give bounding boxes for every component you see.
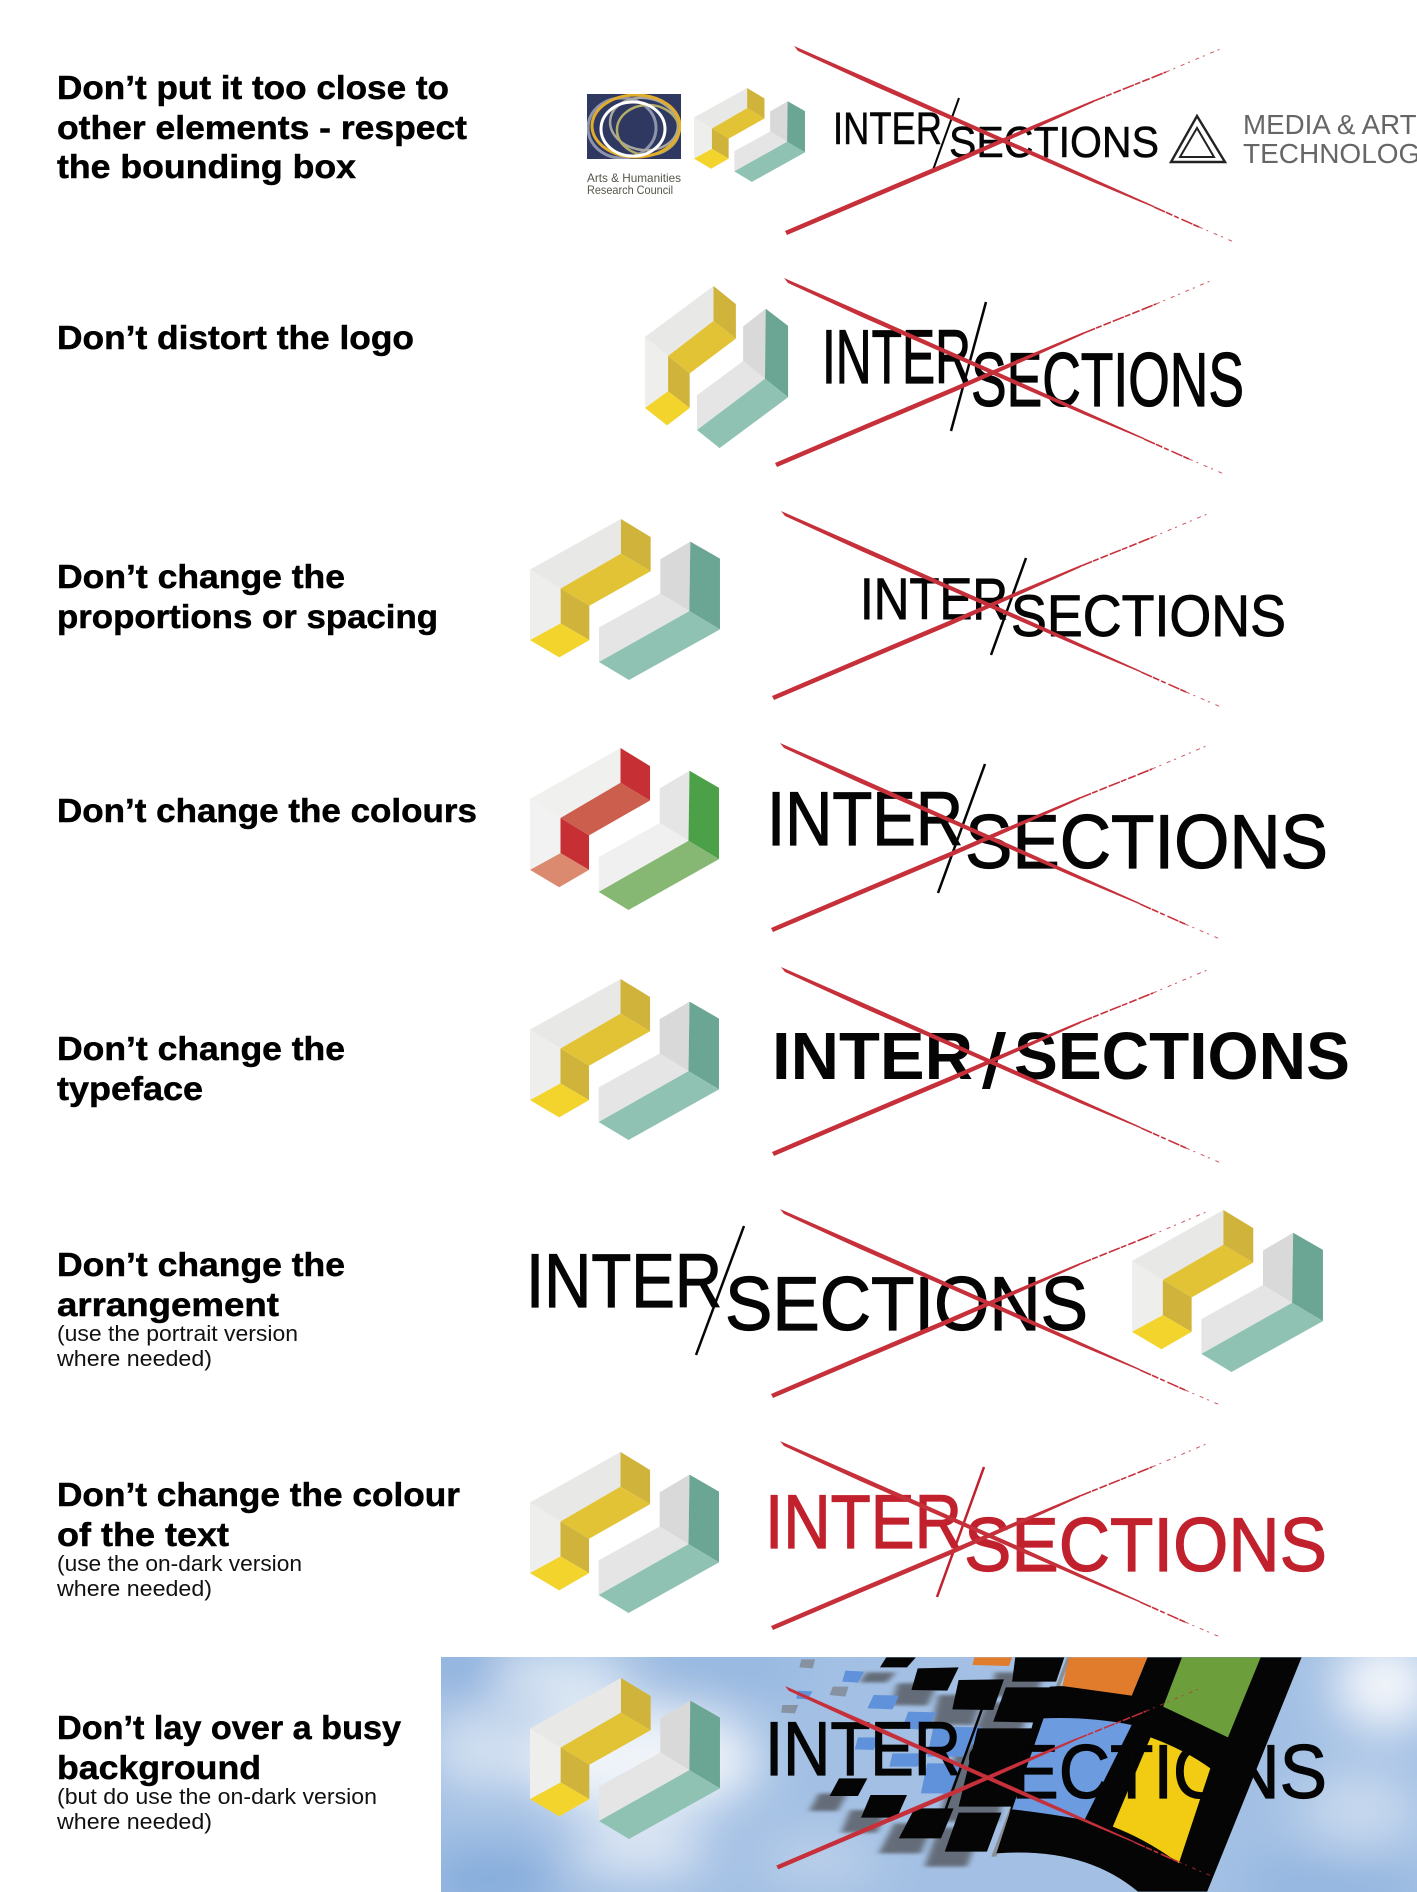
red cross [776,1686,1212,1876]
wordmark [526,1226,1088,1355]
row 6: arrangement [56,1209,1323,1405]
AHRC logo [587,94,681,197]
wordmark [767,764,1328,893]
red cross [785,46,1234,242]
row 7: colour of text [56,1441,1327,1637]
busy sky and flag background [420,1640,1417,1892]
logo symbol [530,1452,719,1613]
heading: colour of the text [56,1477,460,1601]
wordmark: SECTIONS [964,1730,1327,1815]
heading: busy background: where needed) [56,1809,212,1834]
logo symbol on the right [1132,1210,1323,1372]
heading: don't put it too close [57,70,467,186]
row 8: busy background [56,1640,1417,1892]
wordmark [765,1695,1327,1825]
red wordmark: SECTIONS [964,1503,1327,1588]
logo symbol [530,1678,720,1839]
wordmark: SECTIONS [965,800,1328,885]
heading: don't put it too close: the bounding box [57,149,356,186]
heading: proportions or spacing: Don’t change the [57,559,345,596]
red cross [772,511,1221,707]
red cross [771,743,1220,939]
heading: typeface: typeface [57,1071,203,1108]
wordmark: SECTIONS [725,1262,1088,1347]
heading: busy background: (but do use the on-dark version [57,1784,377,1809]
heading: typeface [57,1031,345,1108]
intersections logo symbol [694,88,805,182]
wordmark: INTER [526,1239,722,1324]
red cross [775,278,1224,474]
wordmark: INTER [833,103,942,154]
heading: busy background: Don’t lay over a busy [57,1710,401,1747]
media and arts technology logo [1171,109,1417,169]
wordmark: INTER [765,1707,961,1792]
heading: proportions or spacing: proportions or spacing [57,599,438,636]
logo symbol [530,979,719,1140]
red wordmark [765,1467,1327,1597]
heading: colours: Don’t change the colours [57,793,477,830]
red wordmark: INTER [765,1480,962,1565]
row 1: too close to other elements [57,46,1417,242]
heading: colour of the text: Don’t change the colour [57,1477,460,1514]
heading: busy background [56,1710,401,1834]
heading: proportions or spacing [57,559,438,636]
heading: arrangement: (use the portrait version [57,1321,298,1346]
recoloured logo symbol [530,748,719,910]
heading: don't put it too close: Don’t put it too close to [57,70,449,107]
wordmark: SECTIONS [949,118,1159,167]
red cross [771,1441,1220,1637]
row 5: typeface [57,967,1350,1163]
heading: arrangement [56,1247,345,1371]
red cross [772,967,1221,1163]
wordmark: INTER [767,777,963,862]
wordmark: SECTIONS [1011,584,1286,649]
heading: colour of the text: where needed) [56,1576,212,1601]
stretched wordmark: SECTIONS [971,338,1244,423]
wordmark [860,558,1286,655]
heading: arrangement: Don’t change the [57,1247,345,1284]
heading: don't put it too close: other elements - respect [57,110,467,147]
stretched wordmark: INTER [822,315,971,400]
heading: arrangement: arrangement [57,1287,279,1324]
heading: don't distort: Don’t distort the logo [57,320,414,357]
distorted logo symbol [645,286,788,448]
row 3: proportions [57,511,1286,707]
heading: busy background: background [57,1750,261,1787]
AHRC logo: Research Council [587,183,673,197]
red cross [771,1209,1220,1405]
stretched wordmark [822,302,1244,431]
heading: typeface: Don’t change the [57,1031,345,1068]
AHRC logo: Arts & Humanities [587,171,681,185]
wrong typeface wordmark [772,1019,1350,1094]
logo symbol [530,519,720,680]
wordmark [833,98,1159,170]
windows flag [781,1657,1302,1892]
heading: colour of the text: (use the on-dark version [57,1551,302,1576]
wordmark: INTER [860,567,1008,632]
heading: colour of the text: of the text [57,1517,229,1554]
wrong typeface wordmark: SECTIONS [1014,1019,1350,1094]
heading: arrangement: where needed) [56,1346,212,1371]
row 4: colours [57,743,1328,939]
wrong typeface wordmark: INTER [772,1019,973,1094]
row 2: distort [57,278,1244,474]
